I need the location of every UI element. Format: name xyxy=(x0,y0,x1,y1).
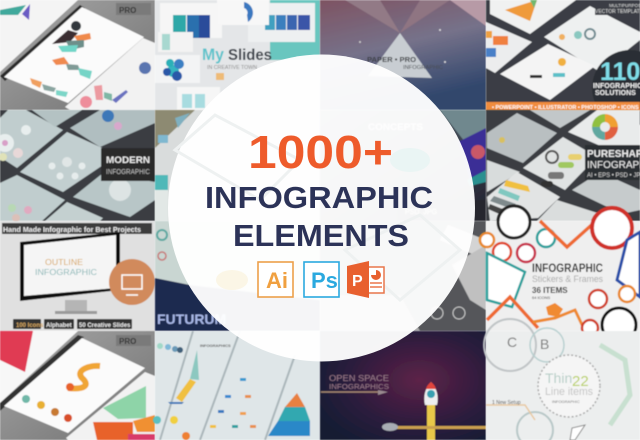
tile: Futurum xyxy=(155,221,320,331)
tile: Thin 22 Line: Thin xyxy=(545,370,572,386)
tile: Outline Infographic monitor: INFOGRAPHIC xyxy=(35,268,97,277)
tile: grey photo xyxy=(320,221,486,331)
tile: Modern Infographic xyxy=(0,110,155,222)
tile: pro slides top left: PRO xyxy=(119,6,136,15)
icon: Adobe Illustrator xyxy=(258,262,293,297)
tile: My Slides: Slides xyxy=(228,47,272,64)
white circle xyxy=(168,54,475,362)
tile: 110 infographic solutions: SOLUTIONS xyxy=(595,90,636,97)
tile: centre left slides xyxy=(155,110,320,221)
icon: Microsoft PowerPoint: P xyxy=(352,273,363,290)
tile: Thin 22 Line: 22 xyxy=(572,373,589,390)
tile: Open Space: INFOGRAPHICS xyxy=(329,384,389,391)
tile: 110 infographic solutions: • POWERPOINT • ILLUSTRATOR • PHOTOSHOP • ICONS xyxy=(492,105,639,111)
icon: Adobe Photoshop xyxy=(304,262,339,297)
tile: Open Space: OPEN SPACE xyxy=(329,374,389,383)
tile: Outline Infographic monitor: Hand Made Infographic for Best Projects xyxy=(3,227,141,234)
tile: Open Space xyxy=(320,331,486,440)
tile: concepts dark xyxy=(320,110,486,221)
tile: Outline Infographic monitor: 100 Icons xyxy=(16,323,44,329)
tile: Pure Shape Infographics xyxy=(486,110,640,221)
tile: Modern Infographic: MODERN xyxy=(106,155,150,166)
tile: Thin 22 Line: INFOGRAPHIC xyxy=(552,399,580,404)
tile: pro slides top left xyxy=(0,0,155,110)
tile: Infographic Stickers and Frames: 64 ICONS xyxy=(532,295,551,300)
tile: Infographic Stickers and Frames: 36 ITEMS xyxy=(532,286,568,295)
tile: Paper Pro xyxy=(320,0,486,110)
tile: My Slides xyxy=(155,0,320,110)
tile: Thin 22 Line: B xyxy=(540,336,549,352)
tile: 110 infographic solutions xyxy=(486,0,640,126)
tile: Infographic Stickers and Frames: INFOGRAPHIC xyxy=(532,261,603,275)
tile: pro slides bottom left: PRO xyxy=(119,337,136,346)
tile: Thin 22 Line: C xyxy=(507,334,517,350)
tile: Futurum: FUTURUM xyxy=(157,311,226,327)
tile: Infographic Stickers and Frames xyxy=(480,206,640,342)
tile: Infographic Stickers and Frames: Stickers & Frames xyxy=(532,274,603,284)
tile: Outline Infographic monitor xyxy=(0,221,155,331)
tile: Outline Infographic monitor: OUTLINE xyxy=(45,258,83,267)
heading: elements: ELEMENTS xyxy=(233,218,409,253)
icon: Adobe Illustrator: Ai xyxy=(266,268,288,293)
tile: My Slides: My xyxy=(202,45,224,64)
heading: infographic: INFOGRAPHIC xyxy=(205,180,433,215)
tile: Thin 22 Line xyxy=(484,319,640,440)
tile: vertical infographics: INFOGRAPHICS xyxy=(200,343,231,348)
tile: concepts dark: PSD, JPG xyxy=(405,209,437,216)
tile: concepts dark: CONCEPTS xyxy=(368,122,423,132)
tile: Paper Pro: INFOGRAPHIC xyxy=(403,65,443,71)
tile: 110 infographic solutions: 110 xyxy=(600,58,640,86)
icon: Adobe Photoshop: Ps xyxy=(311,268,338,293)
tile: Modern Infographic: INFOGRAPHIC xyxy=(106,167,150,176)
tile: My Slides: IN CREATIVE TOWN xyxy=(207,65,257,71)
tile: vertical infographics xyxy=(153,331,320,440)
tile: pro slides bottom left xyxy=(0,331,155,440)
icon: Microsoft PowerPoint xyxy=(347,261,384,298)
tile: Thin 22 Line: 1 New Setup xyxy=(492,400,521,406)
tile: Thin 22 Line: Line items xyxy=(545,386,593,398)
tile: Outline Infographic monitor: Alphabet xyxy=(46,323,72,329)
heading: 1000+: 1000+ xyxy=(248,126,393,178)
tile: Outline Infographic monitor: 50 Creative Slides xyxy=(79,323,131,329)
tile: Paper Pro: PAPER • PRO xyxy=(367,55,416,64)
